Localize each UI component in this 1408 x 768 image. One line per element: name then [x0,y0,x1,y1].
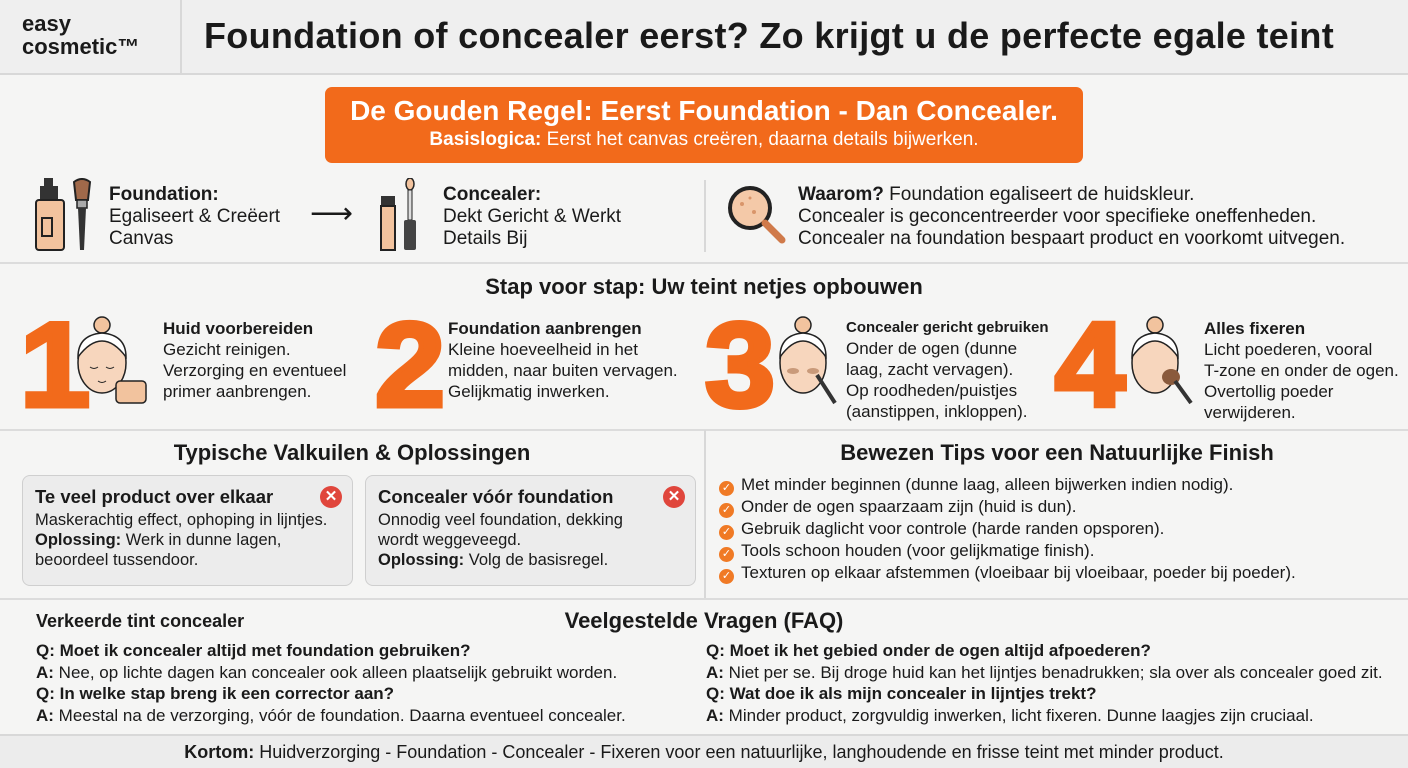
tips list: Onder de ogen spaarzaam zijn (huid is dun). [741,497,1076,516]
golden rule banner: De Gouden Regel: Eerst Foundation - Dan Concealer. [350,95,1058,126]
text: foundation [109,184,280,249]
text: waarom: Concealer is geconcentreerder voor specifieke oneffenheden. [798,206,1316,227]
tips list: ✓ [722,570,731,582]
step 4: verwijderen. [1204,403,1296,422]
step 2 [375,298,678,432]
heading: FAQ: Veelgestelde Vragen (FAQ) [565,608,843,633]
logo: cosmetic™ [22,34,139,59]
step 1: Huid voorbereiden [163,319,313,338]
steps heading: Stap voor stap: Uw teint netjes opbouwen [485,274,923,299]
text: foundation: Egaliseert & Creëert [109,206,280,227]
logo [22,11,139,59]
text: waarom: Waarom? Foundation egaliseert de huidskleur. [798,184,1194,205]
step 4 [1054,298,1399,432]
step 1: primer aanbrengen. [163,382,311,401]
icon: concealer [380,178,416,251]
step 4: 4 [1055,298,1125,432]
text: concealer: Concealer: [443,184,541,205]
text: waarom: Concealer na foundation bespaart product en voorkomt uitvegen. [798,228,1345,249]
tips list: ✓ [722,548,731,560]
tips list: Met minder beginnen (dunne laag, alleen bijwerken indien nodig). [741,475,1233,494]
text: foundation: Foundation: [109,184,219,205]
step 3: Op roodheden/puistjes [846,381,1017,400]
step 3: (aanstippen, inkloppen). [846,402,1027,421]
footer: Kortom: Huidverzorging - Foundation - Concealer - Fixeren voor een natuurlijke, langhoudende en frisse teint met minder product. [184,742,1224,762]
step 1 [20,298,346,432]
step 3: 3 [705,298,775,432]
footer [0,734,1408,768]
card 1: Maskerachtig effect, ophoping in lijntjes. [35,511,327,529]
card 2 [365,475,696,586]
card 1: Te veel product over elkaar [35,486,273,507]
tips list [719,475,1296,584]
step 1: Gezicht reinigen. [163,340,291,359]
card 1: Oplossing: Werk in dunne lagen, [35,531,281,549]
step 3: Concealer gericht gebruiken [846,319,1049,336]
FAQ right: Q: Moet ik het gebied onder de ogen altijd afpoederen? [706,641,1151,660]
icon: face [77,316,147,404]
text: waarom [798,184,1345,249]
text: foundation: Canvas [109,228,173,249]
FAQ left: Q: Moet ik concealer altijd met foundation gebruiken? [36,641,470,660]
tips list: ✓ [722,482,731,494]
text: concealer: Details Bij [443,228,527,249]
card 2: ✕ [668,488,680,505]
step 1: Verzorging en eventueel [163,361,346,380]
card 2: wordt weggeveegd. [378,531,521,549]
icon: magnifier [728,186,786,244]
step 3: laag, zacht vervagen). [846,360,1013,379]
FAQ right [706,641,1383,725]
step 3: Onder de ogen (dunne [846,339,1017,358]
step 2: midden, naar buiten vervagen. [448,361,678,380]
card 2: Onnodig veel foundation, dekking [378,511,623,529]
icon: foundation bottle and brush [35,178,92,251]
step 3 [705,298,1049,432]
label: verkeerde tint: Verkeerde tint concealer [36,611,244,631]
heading: tips: Bewezen Tips voor een Natuurlijke Finish [840,440,1274,465]
golden rule banner: Basislogica: Eerst het canvas creëren, daarna details bijwerken. [429,129,979,150]
FAQ right: Q: Wat doe ik als mijn concealer in lijntjes trekt? [706,684,1096,703]
step 4: Licht poederen, vooral [1204,340,1372,359]
step 4: T-zone en onder de ogen. [1204,361,1399,380]
tips list: Tools schoon houden (voor gelijkmatige finish). [741,541,1094,560]
arrow: ⟶ [310,197,353,230]
FAQ left: A: Meestal na de verzorging, vóór de foundation. Daarna eventueel concealer. [36,706,626,725]
step 2: Kleine hoeveelheid in het [448,340,638,359]
step 4: Alles fixeren [1204,319,1305,338]
tips list: Texturen op elkaar afstemmen (vloeibaar bij vloeibaar, poeder bij poeder). [741,563,1296,582]
step 2: 2 [375,298,445,432]
icon: face concealer [779,316,837,404]
logo: easy [22,11,71,36]
FAQ right: A: Minder product, zorgvuldig inwerken, licht fixeren. Dunne laagjes zijn cruciaal. [706,706,1314,725]
card 2: Oplossing: Volg de basisregel. [378,551,608,569]
step 4: Overtollig poeder [1204,382,1333,401]
step 2: Gelijkmatig inwerken. [448,382,610,401]
text: concealer [443,184,621,249]
tips list: ✓ [722,504,731,516]
heading: valkuilen: Typische Valkuilen & Oplossingen [174,440,530,465]
card 1 [22,475,353,586]
text: concealer: Dekt Gericht & Werkt [443,206,621,227]
tips list: Gebruik daglicht voor controle (harde randen opsporen). [741,519,1164,538]
FAQ left [36,641,626,725]
FAQ left: A: Nee, op lichte dagen kan concealer ook alleen plaatselijk gebruikt worden. [36,663,617,682]
FAQ left: Q: In welke stap breng ik een corrector aan? [36,684,394,703]
golden rule banner [325,87,1083,163]
icon: face powder [1131,316,1193,404]
step 2: Foundation aanbrengen [448,319,642,338]
FAQ right: A: Niet per se. Bij droge huid kan het lijntjes benadrukken; sla over als concealer goed zit. [706,663,1383,682]
header band [0,0,1408,75]
card 2: Concealer vóór foundation [378,486,613,507]
card 1: beoordeel tussendoor. [35,551,198,569]
title: Foundation of concealer eerst? Zo krijgt u de perfecte egale teint [204,15,1334,56]
card 1: ✕ [325,488,337,505]
step 1: 1 [20,298,90,432]
tips list: ✓ [722,526,731,538]
